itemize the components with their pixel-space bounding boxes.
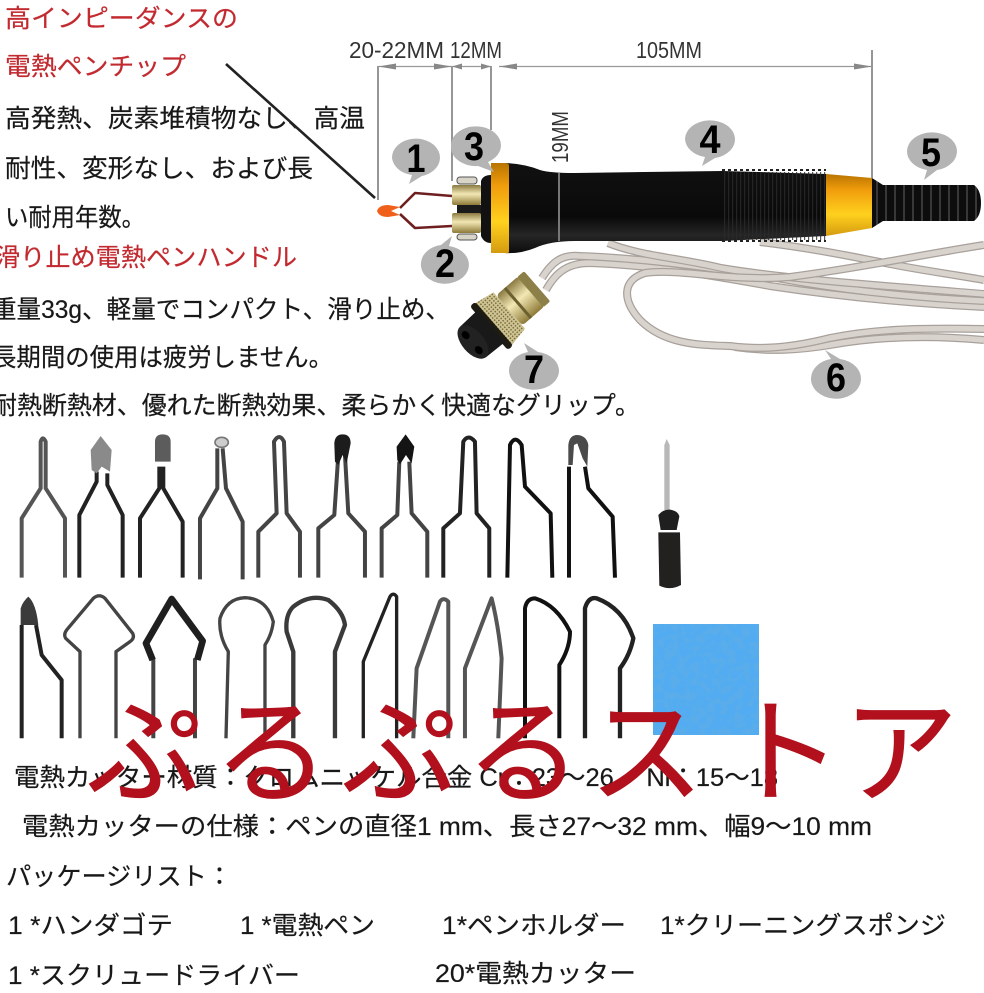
label: 20-22MM: 20-22MM (349, 37, 444, 63)
callout: balloon 6 (811, 350, 861, 400)
arrow: leader line to tip (226, 64, 375, 198)
cable (542, 242, 984, 350)
watermark: store name: ぷるぷるストア (87, 690, 958, 818)
tip 17 (413, 599, 448, 738)
text: handle line 1: 重量33g、軽量でコンパクト、滑り止め、 (0, 296, 450, 324)
panel: handle features text (0, 244, 640, 420)
text: handle line 2: 長期間の使用は疲労しません。 (0, 344, 333, 372)
text: package list heading: パッケージリスト： (6, 863, 232, 891)
tip 8 (443, 437, 489, 578)
tip 11 (21, 597, 62, 738)
text: handle line 3: 耐熱断熱材、優れた断熱効果、柔らかく快適なグリップ。 (0, 392, 640, 420)
yellow collar (491, 163, 509, 253)
callout: balloon 7: 7 (524, 348, 544, 392)
callout: balloon 2 (421, 236, 469, 286)
tip 15 (286, 598, 345, 738)
callout: balloon 5 (907, 131, 957, 180)
text: tip description line 2: 耐性、変形なし、および長 (5, 155, 313, 183)
brass screws (452, 177, 482, 240)
strain relief (872, 178, 981, 228)
tip 3 (140, 434, 183, 578)
tip 2 (79, 436, 123, 578)
heading: non-slip handle: 滑り止め電熱ペンハンドル (0, 244, 297, 272)
tip 7 (382, 434, 427, 578)
tip 4 (200, 437, 243, 579)
text: item pen holder: 1*ペンホルダー (442, 912, 626, 940)
text: item sponge: 1*クリーニングスポンジ (660, 912, 946, 940)
tip 6 (318, 434, 365, 578)
panel: second row tips continued (525, 598, 633, 738)
tip 16 (363, 594, 397, 738)
label: 12MM: 12MM (450, 37, 502, 63)
text: item screwdriver: 1 *スクリュードライバー (8, 962, 300, 990)
panel: tip features text (5, 5, 365, 232)
callout: balloon 4 (685, 118, 735, 166)
panel: first row tips continued and screwdriver (507, 435, 681, 588)
callout: balloon 7 (509, 343, 559, 392)
icon: aviation connector (446, 264, 556, 371)
callout: balloon 2: 2 (435, 242, 455, 286)
callout: balloon 3 (451, 125, 501, 172)
text: tip description line 3: い耐用年数。 (5, 204, 145, 232)
chart: dimension lines (349, 37, 872, 200)
text: cutter material: 電熱カッター材質：クロムニッケル合金 Cr：23～26、 Ni：15～18 (14, 764, 778, 792)
tip 12 (65, 596, 133, 738)
body (505, 163, 826, 253)
tip 5 (258, 437, 300, 578)
callout: balloon 6: 6 (826, 356, 846, 400)
text: cutter specification: 電熱カッターの仕様：ペンの直径1 mm、長さ27～32 mm、幅9～10 mm (22, 813, 872, 841)
panel: second row of cutter tips (21, 594, 502, 738)
text: item pen: 1 *電熱ペン (240, 912, 375, 940)
panel: first row of cutter tips (22, 434, 489, 579)
text: item soldering iron: 1 *ハンダゴテ (8, 912, 173, 940)
icon: screwdriver (658, 439, 681, 588)
tip 13 (146, 599, 203, 738)
yellow band (826, 174, 872, 236)
icon: heated pen tip wire (377, 193, 452, 228)
text: tip description line 1: 高発熱、炭素堆積物なし、高温 (5, 105, 365, 133)
icon: blue cleaning sponge (653, 624, 759, 735)
tip 10 (568, 435, 615, 578)
text: item cutters: 20*電熱カッター (435, 960, 636, 988)
callout: balloon 5: 5 (921, 131, 941, 175)
panel: specifications and package list (6, 764, 946, 990)
heading: pen tip: 電熱ペンチップ (5, 53, 186, 81)
callout: balloon 1 (392, 137, 440, 184)
tip 19 (525, 598, 570, 738)
label: 19MM: 19MM (547, 111, 573, 163)
callout: balloon 4: 4 (700, 118, 721, 162)
callout: balloon 1: 1 (406, 137, 426, 181)
label: 105MM: 105MM (636, 37, 702, 63)
callout: balloon 3: 3 (464, 125, 484, 169)
icon: pen handle (452, 163, 981, 253)
tip 20 (585, 598, 633, 738)
tip 18 (465, 598, 502, 738)
tip 1 (22, 438, 65, 578)
heading: high impedance tip: 高インピーダンスの (5, 5, 238, 33)
tip 14 (220, 598, 273, 738)
tip 9 (507, 440, 552, 578)
